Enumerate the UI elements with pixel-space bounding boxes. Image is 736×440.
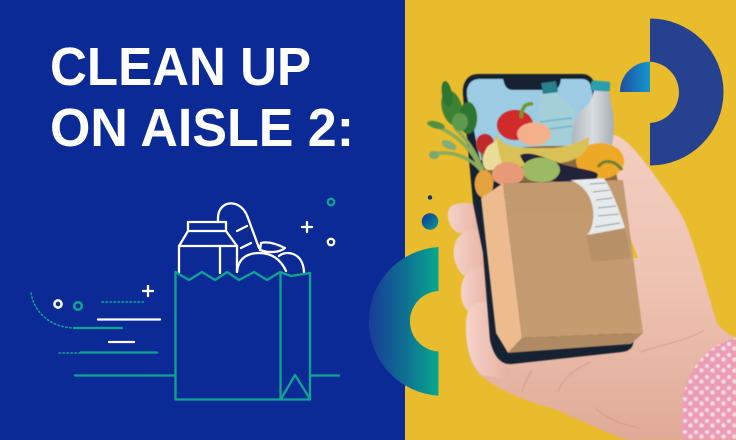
- bag bottom: [508, 333, 643, 353]
- low peach: [492, 162, 524, 186]
- yellow pepper: [576, 143, 624, 179]
- phone body: [463, 74, 633, 364]
- dotted trails: [31, 293, 144, 353]
- title: [50, 37, 354, 158]
- apple: [522, 158, 560, 182]
- sleeve: [682, 338, 736, 440]
- groceries outline: [179, 203, 304, 273]
- receipt: [570, 178, 625, 235]
- finger 3: [461, 267, 492, 313]
- onion: [474, 170, 494, 198]
- left blue panel: [0, 0, 405, 440]
- water bottle: [538, 81, 575, 146]
- decorative half ring top right: [650, 18, 724, 166]
- yellow gap between thumb and bag: [628, 232, 638, 258]
- groceries: [426, 80, 624, 198]
- palm and thumb: [466, 135, 736, 440]
- smartphone: [463, 74, 633, 364]
- speed lines: [74, 328, 339, 376]
- food backing: [480, 142, 618, 182]
- paper bag: [176, 272, 310, 400]
- decorative half ring left: [369, 247, 438, 396]
- paper bag with receipt: [481, 178, 643, 353]
- right yellow panel: [405, 0, 736, 440]
- finger 4: [466, 302, 510, 380]
- phone screen: [467, 79, 600, 160]
- title: ON AISLE 2:: [50, 98, 354, 158]
- red pepper: [476, 104, 533, 154]
- hand holding phone: [448, 135, 736, 440]
- small dots: [422, 195, 438, 230]
- milk bottle: [572, 80, 614, 147]
- line art: grocery bag illustration: [31, 199, 339, 400]
- finger creases: [522, 330, 704, 428]
- bag front: [503, 180, 643, 338]
- eggplant: [520, 153, 598, 182]
- small circles: [54, 300, 62, 308]
- finger 1: [448, 203, 482, 235]
- finger 2: [454, 231, 488, 276]
- peach: [517, 122, 551, 146]
- title: CLEAN UP: [50, 37, 311, 97]
- receipt shadow: [586, 228, 631, 262]
- celery: [426, 80, 484, 175]
- decorative quarter circle: [620, 62, 650, 92]
- bananas: [483, 135, 589, 170]
- bag left side: [481, 183, 522, 353]
